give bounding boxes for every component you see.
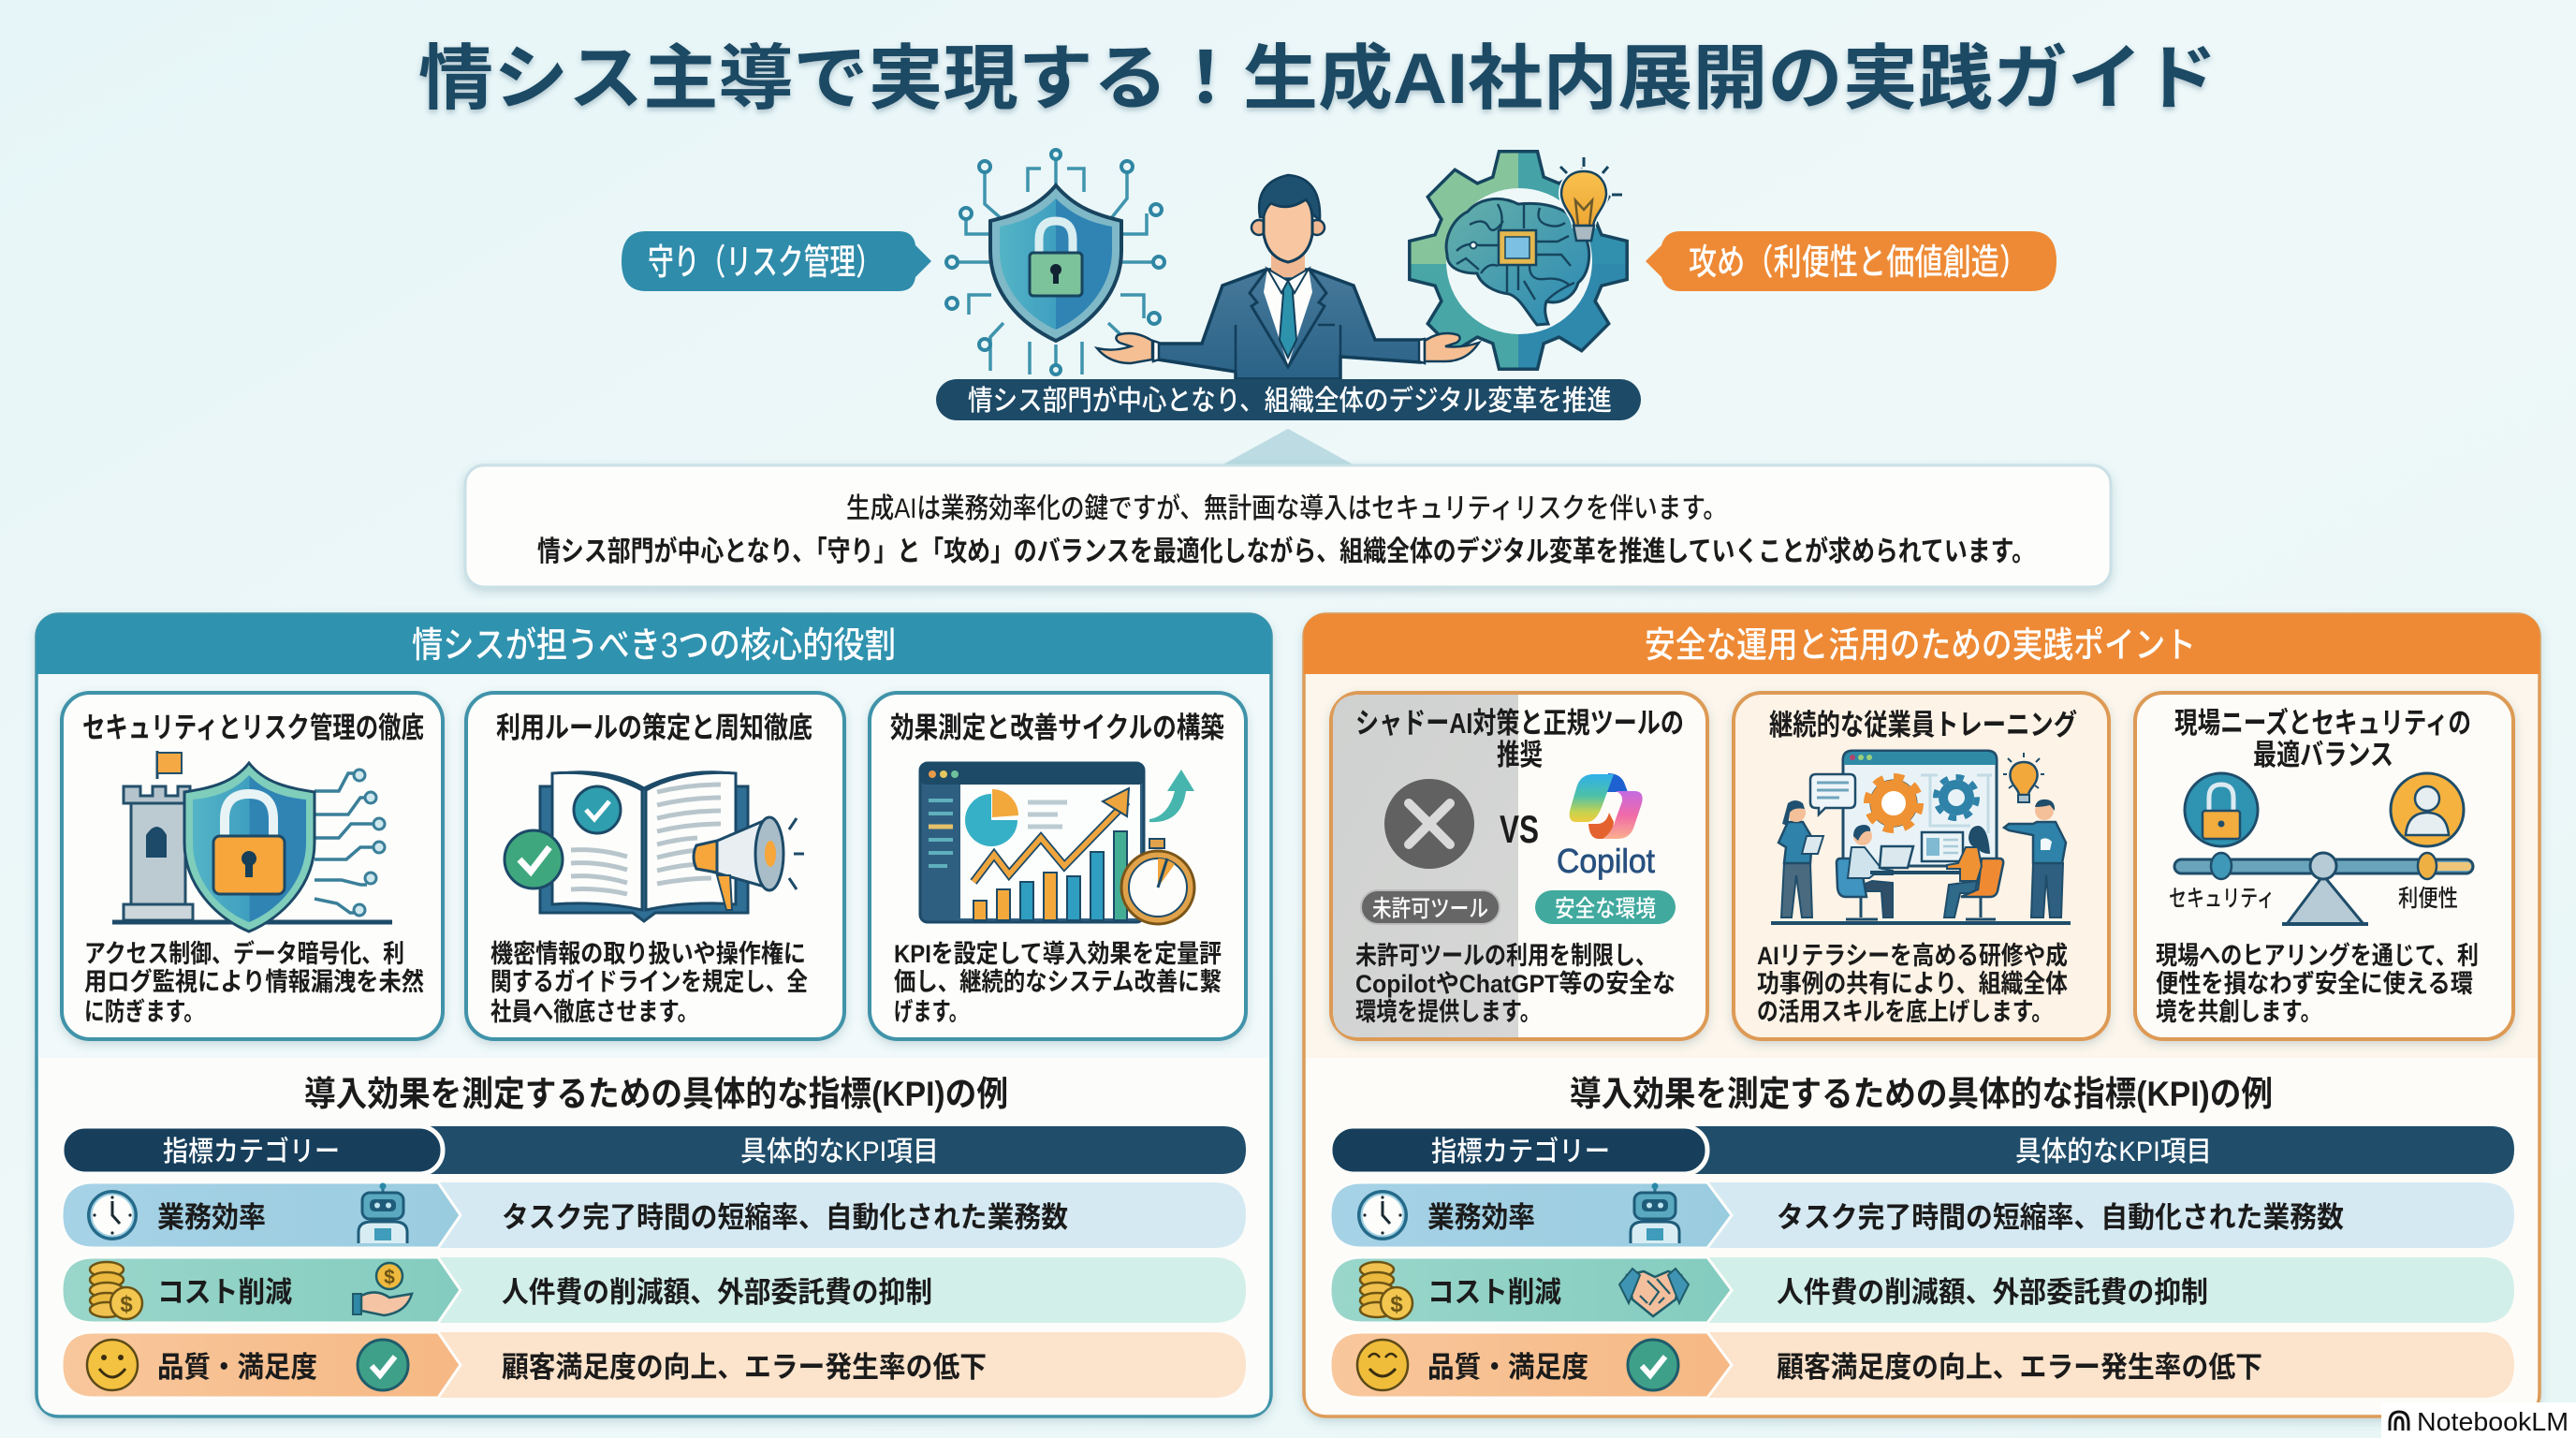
icon: tower, shield, lock xyxy=(112,751,392,932)
icon: balance scale xyxy=(2169,773,2473,924)
card: shadow AI: CopilotやChatGPT等の安全な xyxy=(1355,970,1676,998)
card: shadow AI: シャドーAI対策と正規ツールの xyxy=(1355,707,1684,740)
row: quality xyxy=(1330,1332,2514,1398)
card: training: 継続的な従業員トレーニング xyxy=(1769,709,2077,741)
icon: clock xyxy=(87,1190,138,1240)
card: balance: 現場ニーズとセキュリティの xyxy=(2174,707,2471,740)
KPI heading: 導入効果を測定するための具体的な指標(KPI)の例 xyxy=(1570,1075,2273,1113)
logo: Copilot: Copilot xyxy=(1557,842,1655,880)
arrow: pointer to intro xyxy=(1222,429,1354,465)
tag: safe environment: 安全な環境 xyxy=(1555,896,1656,922)
icon: smile xyxy=(87,1340,138,1390)
panel frame xyxy=(37,614,1271,1416)
card: rules xyxy=(466,693,844,1039)
tag: unapproved tool: 未許可ツール xyxy=(1372,896,1488,922)
title: 情シス主導で実現する！生成AI社内展開の実践ガイド xyxy=(418,39,2217,119)
row: efficiency xyxy=(1330,1182,2514,1248)
logo: Copilot xyxy=(1557,773,1655,880)
table header: 指標カテゴリー xyxy=(1431,1137,1610,1167)
KPI table xyxy=(1330,1126,2514,1398)
tag: safe environment xyxy=(1535,890,1676,924)
panel header: 情シスが担うべき3つの核心的役割 xyxy=(412,626,896,666)
label: VS: VS xyxy=(1500,807,1539,851)
table header: 具体的なKPI項目 xyxy=(740,1137,939,1167)
row: quality: 品質・満足度 xyxy=(157,1351,317,1384)
icon: robot xyxy=(1631,1183,1679,1243)
row: quality: 顧客満足度の向上、エラー発生率の低下 xyxy=(1777,1351,2262,1384)
table header: 具体的なKPI項目 xyxy=(2015,1137,2212,1167)
panel frame xyxy=(1304,614,2539,1416)
row: cost: 人件費の削減額、外部委託費の抑制 xyxy=(502,1276,932,1309)
icon: rule book with megaphone xyxy=(505,772,804,921)
card: balance: 現場へのヒアリングを通じて、利 xyxy=(2156,941,2479,970)
row: quality xyxy=(62,1332,1246,1398)
card: rules: 関するガイドラインを規定し、全 xyxy=(490,968,808,996)
card: measurement: KPIを設定して導入効果を定量評 xyxy=(894,940,1222,968)
chairs and seated people xyxy=(1863,881,1893,917)
card: security: アクセス制御、データ暗号化、利 xyxy=(84,939,404,968)
row: cost xyxy=(62,1257,1246,1323)
illustration: person in suit xyxy=(1097,175,1479,379)
table header: 指標カテゴリー xyxy=(163,1137,340,1167)
caption band: 情シス部門が中心となり、組織全体のデジタル変革を推進 xyxy=(968,386,1612,417)
pill: defense: 守り（リスク管理） xyxy=(648,243,882,283)
right standing person xyxy=(2031,863,2063,917)
icon: balance scale: 利便性 xyxy=(2398,886,2458,912)
intro text box: 情シス部門が中心となり、「守り」と「攻め」のバランスを最適化しながら、組織全体のデジタル変革を推進していくことが求められています。 xyxy=(537,536,2035,567)
KPI background xyxy=(38,1058,1269,1415)
panel: practice points xyxy=(1304,614,2539,1416)
icon: dashboard with chart and stopwatch xyxy=(920,763,1194,924)
card: security: 用ログ監視により情報漏洩を未然 xyxy=(84,967,424,996)
icon: hand with coin: $ xyxy=(384,1267,395,1288)
row: quality: 品質・満足度 xyxy=(1427,1351,1588,1384)
card: rules: 社員へ徹底させます。 xyxy=(490,998,698,1026)
icon: coins xyxy=(90,1262,142,1319)
icon: prohibited tool xyxy=(1384,779,1474,869)
icon: check xyxy=(1628,1340,1678,1390)
KPI background xyxy=(1306,1058,2538,1415)
icon: handshake xyxy=(1619,1269,1689,1316)
KPI table xyxy=(62,1126,1246,1398)
row: efficiency xyxy=(62,1182,1246,1248)
card: training xyxy=(1734,693,2109,1039)
card: shadow AI: 推奨 xyxy=(1497,739,1543,771)
panel: core roles xyxy=(37,614,1271,1416)
card: security: に防ぎます。 xyxy=(84,997,204,1026)
left standing person xyxy=(1781,863,1812,917)
card: training: AIリテラシーを高める研修や成 xyxy=(1757,942,2068,970)
watermark: NotebookLM xyxy=(2381,1402,2576,1438)
card: shadow AI xyxy=(1331,693,1707,1039)
card: measurement xyxy=(870,693,1246,1039)
table header xyxy=(62,1126,1246,1174)
row: efficiency: 業務効率 xyxy=(1427,1201,1535,1234)
card: rules: 機密情報の取り扱いや操作権に xyxy=(490,940,806,968)
icon: smile xyxy=(1357,1340,1408,1390)
card: rules: 利用ルールの策定と周知徹底 xyxy=(496,712,812,744)
icon: robot xyxy=(359,1183,407,1243)
card: measurement: げます。 xyxy=(894,998,968,1026)
card: security: セキュリティとリスク管理の徹底 xyxy=(82,712,424,744)
row: efficiency: 業務効率 xyxy=(157,1201,266,1234)
intro text box: 生成AIは業務効率化の鍵ですが、無計画な導入はセキュリティリスクを伴います。 xyxy=(846,493,1727,524)
watermark: NotebookLM: NotebookLM xyxy=(2417,1407,2569,1436)
light bulb xyxy=(2011,762,2037,795)
caption band xyxy=(936,379,1641,420)
card: security xyxy=(62,693,443,1039)
icon: hand with coin xyxy=(353,1263,412,1315)
pill: offense xyxy=(1646,231,2056,291)
card: shadow AI: 環境を提供します。 xyxy=(1355,998,1541,1026)
row: cost: コスト削減 xyxy=(1427,1276,1561,1309)
icon: clock xyxy=(1357,1190,1408,1240)
row: cost: コスト削減 xyxy=(157,1276,292,1309)
row: cost xyxy=(1330,1257,2514,1323)
icon: balance scale: セキュリティ xyxy=(2169,886,2275,912)
card: balance xyxy=(2135,693,2513,1039)
pill: defense xyxy=(622,231,931,291)
card: training: の活用スキルを底上げします。 xyxy=(1757,998,2053,1026)
panel header xyxy=(1304,614,2539,674)
table header xyxy=(1330,1126,2514,1174)
icon: AI brain gear with light bulb xyxy=(1404,145,1636,376)
icon: security shield with circuits xyxy=(946,150,1164,374)
row: cost: 人件費の削減額、外部委託費の抑制 xyxy=(1777,1276,2208,1309)
icon: check xyxy=(358,1340,408,1390)
icon: coins xyxy=(1360,1262,1412,1319)
icon: training team xyxy=(1771,751,2071,923)
card: balance: 便性を損なわず安全に使える環 xyxy=(2156,970,2473,998)
tag: unapproved tool xyxy=(1361,890,1500,924)
card: measurement: 価し、継続的なシステム改善に繋 xyxy=(894,968,1222,996)
row: efficiency: タスク完了時間の短縮率、自動化された業務数 xyxy=(1777,1201,2344,1234)
card: measurement: 効果測定と改善サイクルの構築 xyxy=(890,712,1224,744)
card: balance: 境を共創します。 xyxy=(2156,998,2321,1026)
KPI heading: 導入効果を測定するための具体的な指標(KPI)の例 xyxy=(304,1075,1008,1113)
card: balance: 最適バランス xyxy=(2253,739,2393,771)
row: efficiency: タスク完了時間の短縮率、自動化された業務数 xyxy=(502,1201,1068,1234)
pill: offense: 攻め（利便性と価値創造） xyxy=(1689,243,2027,283)
card: training: 功事例の共有により、組織全体 xyxy=(1757,970,2068,998)
row: quality: 顧客満足度の向上、エラー発生率の低下 xyxy=(502,1351,987,1384)
card: shadow AI: 未許可ツールの利用を制限し、 xyxy=(1355,942,1657,970)
intro text box xyxy=(465,465,2111,587)
panel header: 安全な運用と活用のための実践ポイント xyxy=(1645,626,2196,666)
panel header xyxy=(37,614,1271,674)
